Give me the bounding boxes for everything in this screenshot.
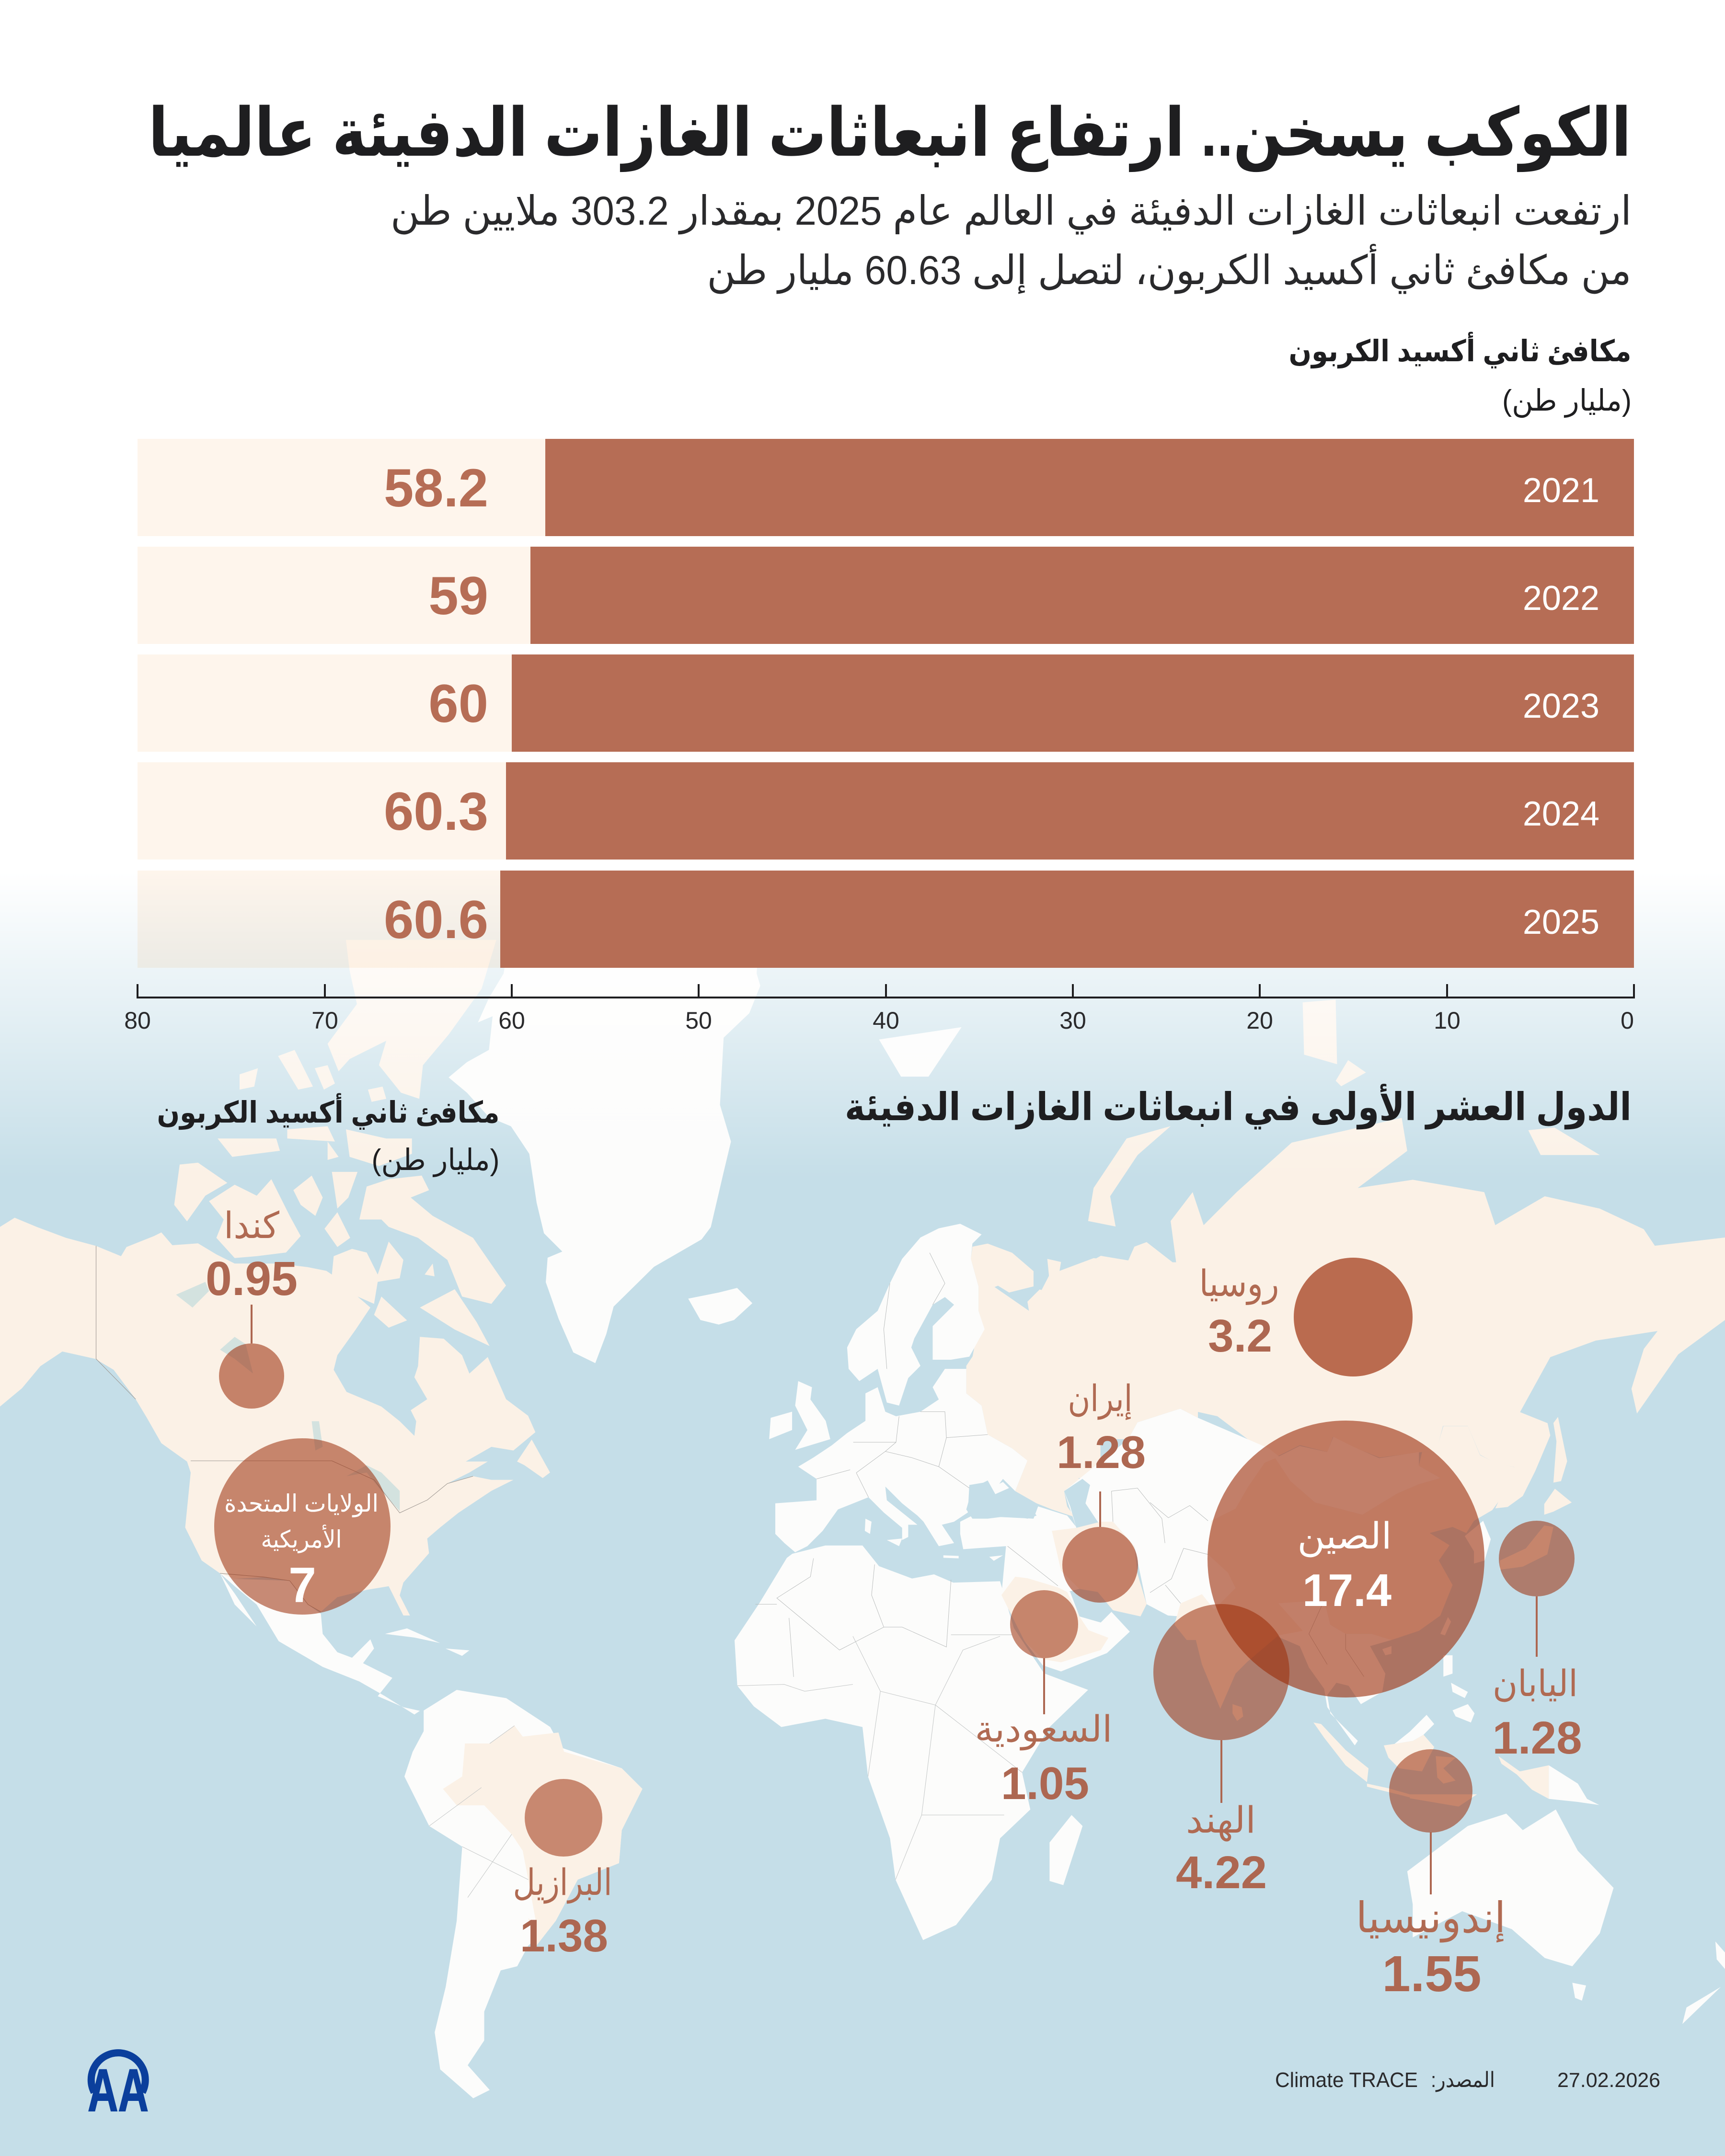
- bubble: Japan: [1492, 1521, 1582, 1764]
- land: Caribbean: [385, 1628, 470, 1656]
- land: Indonesia highlighted: [1313, 1722, 1549, 1807]
- lakes of North America: [176, 1282, 400, 1511]
- subtitle: ارتفعت انبعاثات الغازات الدفيئة في العالم عام 2025 بمقدار 303.2 ملايين طن: [391, 188, 1632, 235]
- bar 2023: 60: [428, 674, 488, 734]
- borders: North America: [96, 1246, 473, 1612]
- bar chart axis: 80: [124, 1007, 151, 1034]
- bubble: Indonesia: [1356, 1749, 1506, 2002]
- subtitle: من مكافئ ثاني أكسيد الكربون، لتصل إلى 60.63 مليار طن: [707, 244, 1631, 294]
- borders: Asia: [1150, 1502, 1364, 1677]
- land: Korea: [1465, 1521, 1491, 1564]
- bar chart axis: 0: [1621, 1007, 1634, 1034]
- map unit label: مكافئ ثاني أكسيد الكربون: [157, 1093, 499, 1130]
- bar chart axis: 50: [685, 1007, 712, 1034]
- bubble: India: [1153, 1604, 1289, 1898]
- bar 2021: 2021: [1523, 471, 1599, 510]
- bubble: Russia: 3.2: [1208, 1310, 1272, 1362]
- top white area and fade over the map: [0, 0, 1725, 1179]
- bar 2023: [138, 654, 1634, 752]
- bubble: China: 17.4: [1302, 1565, 1392, 1616]
- land: continental Europe: [775, 1369, 1027, 1552]
- subtitle: [391, 188, 1632, 294]
- bubble: Iran: إيران: [1068, 1378, 1133, 1420]
- borders: Europe and North Africa: [756, 1253, 1165, 1677]
- land: China highlighted: [1208, 1426, 1515, 1640]
- bubble: United States: 7: [288, 1558, 316, 1613]
- logo: Anadolu Agency: AA: [88, 2057, 149, 2124]
- bar 2022: 59: [428, 566, 488, 626]
- land: Malaysian Borneo: [1394, 1715, 1434, 1744]
- bubble: China: [1208, 1421, 1484, 1697]
- bubble: United States: [214, 1438, 391, 1615]
- bar 2021: 58.2: [384, 458, 488, 518]
- bar 2025: 60.6: [384, 890, 488, 950]
- land: Arabian peninsula: [1001, 1577, 1130, 1672]
- land: Scandinavia: [847, 1224, 985, 1406]
- land: Saudi Arabia highlighted: [1001, 1577, 1108, 1662]
- land: Greenland: [448, 867, 760, 1363]
- land: Ellesmere Island: [328, 940, 496, 1099]
- map layer: North America: [0, 1163, 550, 1715]
- bar chart unit label: (مليار طن): [1502, 384, 1632, 418]
- land: Australia: [1407, 1810, 1613, 1966]
- bar chart axis: 70: [311, 1007, 338, 1034]
- land: South America: [404, 1690, 643, 2098]
- bubble: Canada: [206, 1205, 298, 1409]
- land: Canadian islands: [174, 1163, 550, 1478]
- bar 2023: 2023: [1523, 687, 1599, 725]
- source: Climate TRACE: [1275, 2068, 1418, 2092]
- bubble: India: الهند: [1186, 1800, 1256, 1842]
- land: Sakhalin: [1553, 1417, 1567, 1483]
- land: India highlighted: [1174, 1588, 1303, 1709]
- bubble: Russia: [1199, 1258, 1413, 1376]
- bar chart axis: 10: [1434, 1007, 1460, 1034]
- bubble: China: الصين: [1298, 1516, 1392, 1558]
- bubble: Brazil: البرازيل: [513, 1862, 612, 1904]
- bar 2025: 2025: [1523, 903, 1599, 941]
- bar chart axis: 30: [1059, 1007, 1086, 1034]
- land: Taiwan, Hainan, Philippines: [1382, 1617, 1474, 1722]
- map unit label: [157, 1093, 499, 1177]
- bar 2025: [138, 871, 1634, 968]
- land: Africa: [735, 1546, 1088, 1940]
- bar 2022: 2022: [1523, 579, 1599, 618]
- bubble: Japan: 1.28: [1492, 1712, 1582, 1764]
- land: Mongolia: [1275, 1437, 1440, 1514]
- land: Baja California: [220, 1573, 257, 1627]
- bubble: Saudi Arabia: [975, 1590, 1113, 1809]
- land: Queen Elizabeth Islands: [218, 1050, 412, 1166]
- bubble: Iran: 1.28: [1057, 1427, 1146, 1478]
- bubble: Saudi Arabia: 1.05: [1001, 1758, 1089, 1809]
- date: 27.02.2026: [1557, 2069, 1660, 2092]
- land: Tasmania and New Zealand: [1572, 1941, 1725, 2024]
- bar chart axis: 40: [873, 1007, 899, 1034]
- land: Turkey and Levant: [960, 1506, 1080, 1595]
- world map: [0, 867, 1725, 2098]
- land: Brazil highlighted: [443, 1726, 643, 1946]
- land: Crimea: [991, 1482, 1009, 1494]
- map layer: East and Southeast Asia: [1150, 1417, 1599, 1807]
- bar chart axis: 20: [1246, 1007, 1273, 1034]
- bar chart axis: 60: [498, 1007, 525, 1034]
- land: Madagascar: [1049, 1815, 1082, 1885]
- land: Svalbard: [879, 1027, 962, 1077]
- bar 2022: [138, 547, 1634, 644]
- bubble: Indonesia: 1.55: [1382, 1946, 1482, 2002]
- bubble: Brazil: 1.38: [520, 1910, 608, 1961]
- bar 2024: [138, 762, 1634, 860]
- land: Mediterranean islands: [865, 1519, 1003, 1561]
- bar chart unit label: مكافئ ثاني أكسيد الكربون: [1289, 332, 1631, 368]
- map unit label: (مليار طن): [372, 1144, 499, 1177]
- bar 2024: 60.3: [384, 781, 488, 841]
- borders: Africa south and South America: [429, 1636, 1022, 1897]
- bar chart unit label: [1289, 332, 1632, 418]
- bubble: Iran: [1057, 1378, 1146, 1603]
- map heading: الدول العشر الأولى في انبعاثات الغازات الدفيئة: [845, 1084, 1632, 1130]
- logo: Anadolu Agency: [88, 2053, 149, 2124]
- map layer: Europe and Middle East: [688, 1224, 1300, 1677]
- land: Japan highlighted: [1500, 1489, 1572, 1570]
- map layer: Greenland and Arctic Canada: [218, 867, 760, 1363]
- bar chart axis: [124, 984, 1634, 1034]
- bubble: Canada: 0.95: [206, 1252, 298, 1306]
- land: Canada and United States: [0, 1218, 535, 1616]
- bubble: Canada: كندا: [224, 1205, 280, 1246]
- source: [1275, 2068, 1495, 2092]
- land: Russian Arctic islands: [1088, 999, 1600, 1227]
- land: Russia west highlighted: [966, 1242, 1198, 1517]
- land: Sri Lanka: [1232, 1704, 1243, 1721]
- land: Central Asia: [1064, 1409, 1300, 1626]
- land: Southeast Asia mainland: [1278, 1600, 1392, 1745]
- bubble: United States: الولايات المتحدة: [224, 1490, 379, 1517]
- bubble: Brazil: [513, 1779, 612, 1961]
- seas: Black Sea and Caspian: [966, 1479, 1101, 1529]
- land: Britain and Ireland: [769, 1381, 830, 1450]
- map layer: southern continents and Siberia: [404, 999, 1725, 2098]
- land: Papua New Guinea: [1549, 1765, 1599, 1805]
- bar 2021: [138, 439, 1634, 536]
- bubble: Japan: اليابان: [1493, 1663, 1578, 1704]
- land: Iceland: [688, 1288, 752, 1325]
- bar 2024: 2024: [1523, 795, 1599, 833]
- bubble: United States: الأمريكية: [261, 1525, 342, 1553]
- bubble: Indonesia: إندونيسيا: [1356, 1894, 1506, 1943]
- land: Russia highlighted: [967, 1118, 1725, 1508]
- bubble: India: 4.22: [1176, 1847, 1267, 1898]
- bubble: Russia: روسيا: [1199, 1263, 1279, 1305]
- source: المصدر:: [1431, 2068, 1495, 2092]
- land: Mexico and Central America: [220, 1573, 420, 1715]
- bubble: Saudi Arabia: السعودية: [975, 1709, 1113, 1751]
- bar chart: [138, 439, 1634, 968]
- land: Iran highlighted: [1052, 1522, 1147, 1617]
